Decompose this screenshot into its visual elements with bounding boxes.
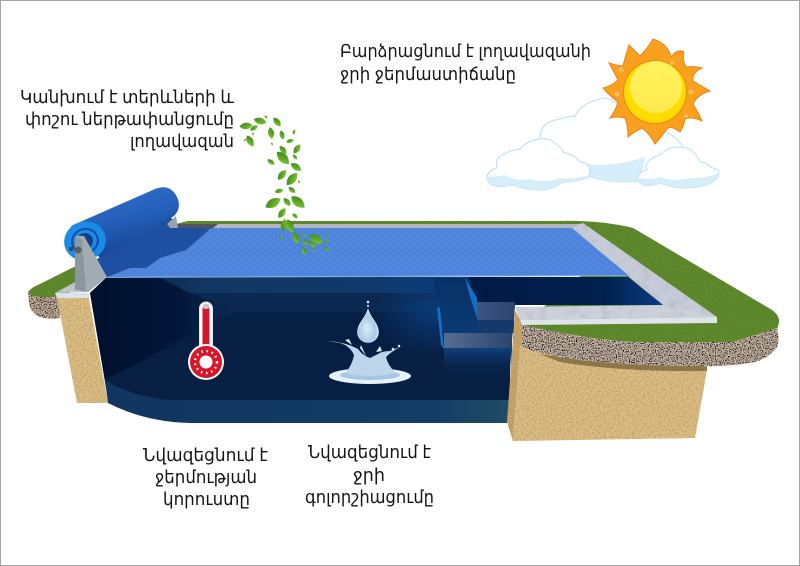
right paving strip: [572, 223, 717, 317]
pool steps: [374, 268, 515, 376]
right cloud: [637, 147, 719, 188]
text: reduces heat loss: Նվազեցնում է: [143, 445, 268, 465]
text: reduces heat loss: կորուստը: [163, 489, 250, 509]
back grass strip: [176, 221, 779, 342]
text: reduces water evaporation: գոլորշիացումը: [305, 487, 434, 507]
text: prevents leaves and dust: փոշու ներթափանցումը: [25, 109, 234, 129]
icon: thermometer: [188, 302, 224, 380]
left sand foundation: [57, 298, 108, 403]
big back cloud: [540, 98, 686, 182]
left wall: [90, 277, 240, 380]
right sand foundation: [513, 340, 707, 441]
back paving strip: [177, 224, 590, 229]
icon: water drop and splash: [328, 301, 411, 384]
left gravel edge: [28, 292, 60, 319]
pool interior: [90, 268, 663, 423]
text: raises water temperature: Բարձրացնում է լողավազանի: [340, 41, 591, 61]
text: prevents leaves and dust: Կանխում է տերևների և: [20, 87, 234, 107]
far roller bracket: [167, 216, 178, 228]
clouds: [487, 98, 719, 190]
text: reduces water evaporation: ջրի: [353, 465, 385, 485]
text: raises water temperature: ջրի ջերմաստիճանը: [340, 64, 516, 84]
roller shadow on cover: [92, 216, 210, 277]
right paving front: [515, 305, 717, 320]
right sand side: [507, 310, 524, 441]
solar cover: [106, 228, 630, 278]
text: reduces heat loss: ջերմության: [155, 467, 257, 487]
pool illustration: [28, 187, 779, 441]
right gravel edge: [522, 325, 778, 366]
text: reduces water evaporation: Նվազեցնում է: [308, 442, 431, 462]
cover roller: [59, 187, 179, 267]
front glass band: [105, 380, 510, 423]
roller bracket: [69, 236, 107, 292]
far pool section: [468, 277, 663, 305]
icon: sun: [603, 39, 710, 144]
text: prevents leaves and dust: լողավազան: [130, 131, 234, 151]
back wall: [90, 277, 663, 400]
left cloud: [487, 139, 590, 190]
left grass edge: [28, 266, 100, 298]
shadow under gravel: [540, 354, 707, 371]
upper wall band: [90, 277, 470, 293]
pool floor: [105, 312, 510, 400]
left paving corner: [55, 277, 107, 293]
icon: falling leaves: [239, 115, 331, 256]
